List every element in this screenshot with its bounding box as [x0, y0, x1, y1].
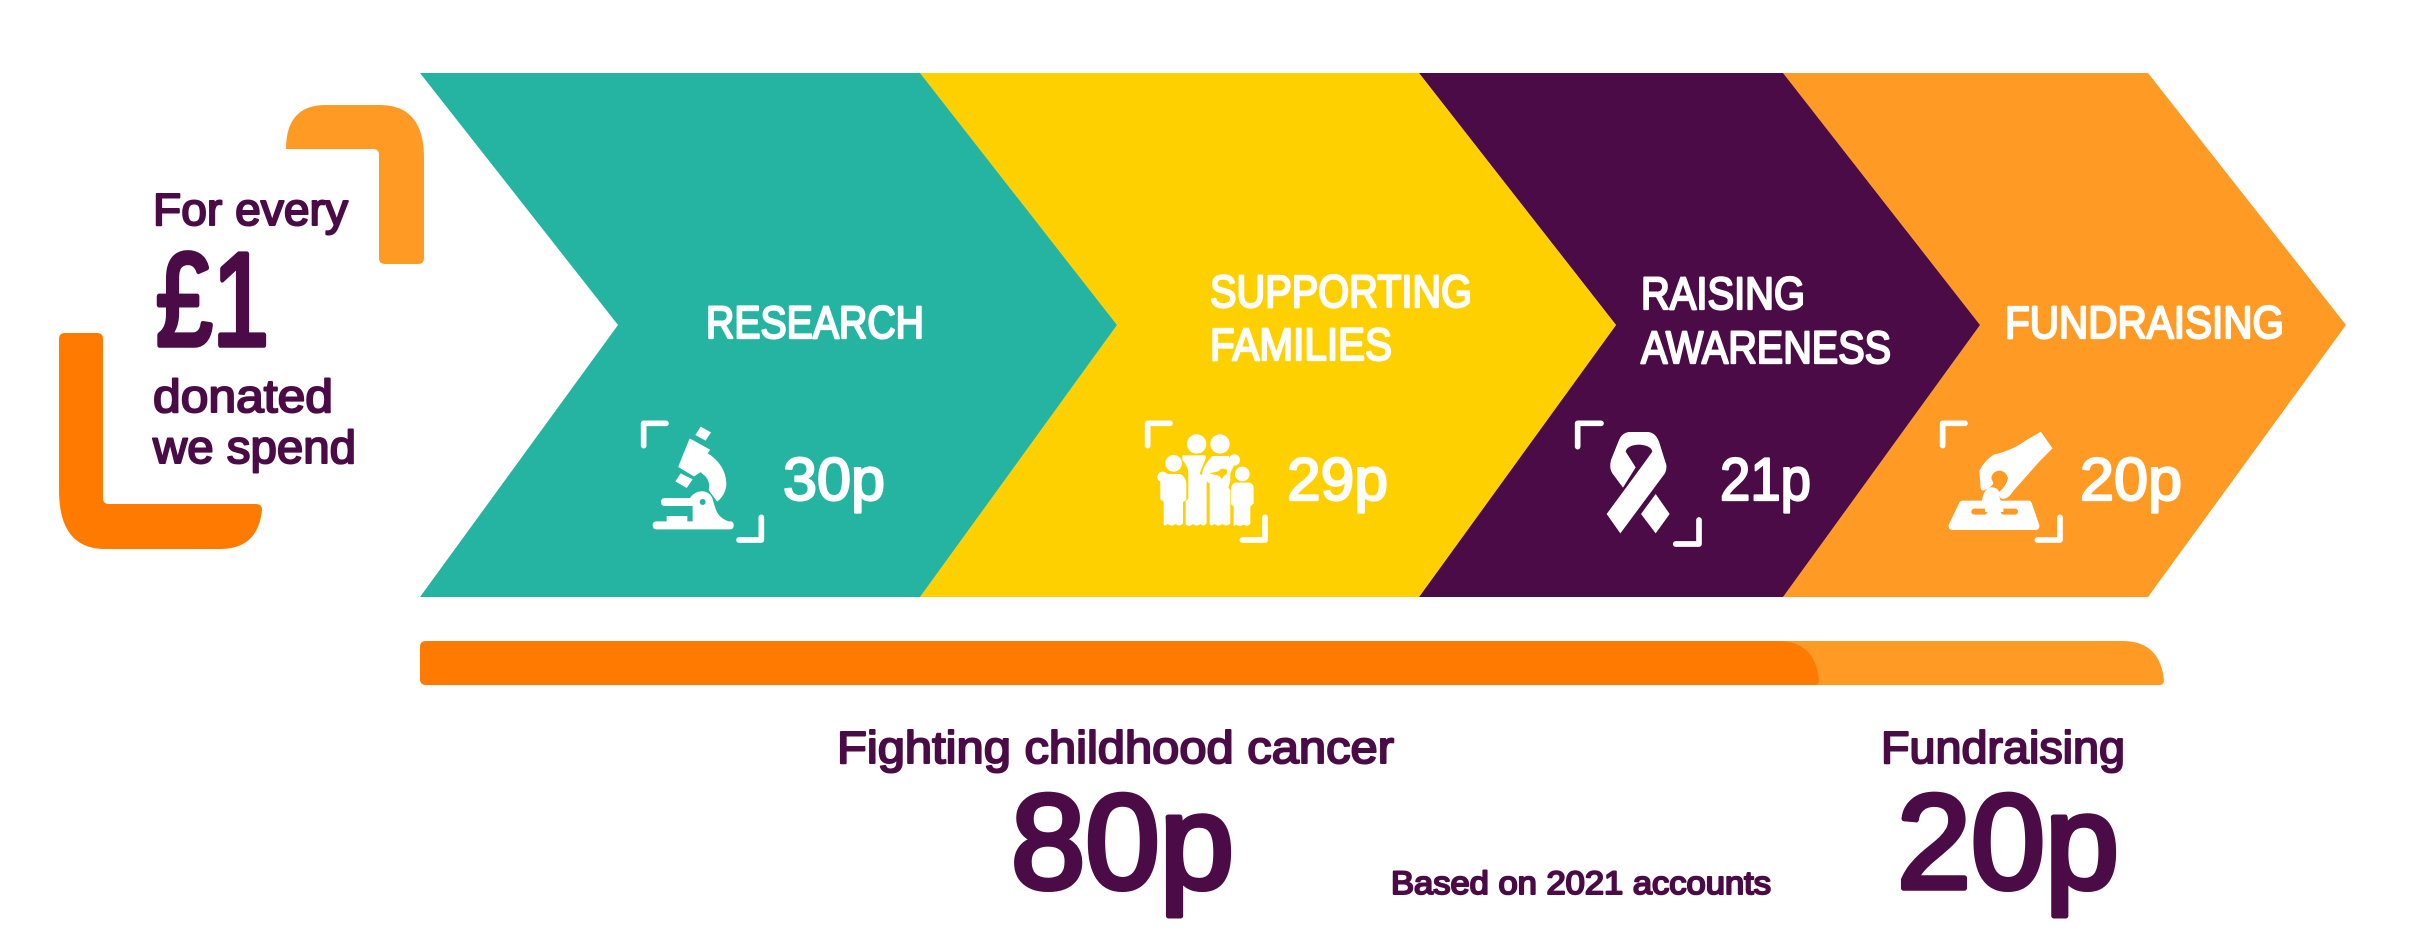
bar: 80p versus 20p split [420, 641, 2164, 685]
label: raising awareness: RAISING [1641, 268, 1805, 319]
label: fundraising total: Fundraising [1881, 722, 2125, 773]
label: raising awareness: AWARENESS [1641, 322, 1891, 373]
value: 21p: 21p [1720, 446, 1811, 513]
label: supporting families: SUPPORTING [1210, 266, 1472, 317]
heading: for every £1 donated we spend: donated [153, 370, 333, 422]
icon: microscope [644, 423, 761, 540]
panel: fundraising chevron [1783, 73, 2346, 597]
heading: for every £1 donated we spend: For every [153, 184, 349, 235]
footnote: based on 2021 accounts: Based on 2021 accounts [1391, 865, 1771, 901]
heading: for every £1 donated we spend: we spend [152, 421, 356, 473]
heading: for every £1 donated we spend: £1 [156, 226, 269, 373]
label: raising awareness [1641, 268, 1891, 373]
label: research: RESEARCH [706, 297, 924, 348]
label: fighting childhood cancer: Fighting childhood cancer [837, 722, 1394, 773]
label: supporting families: FAMILIES [1210, 319, 1392, 370]
value: 30p: 30p [783, 446, 885, 513]
value: 20p: 20p [2080, 446, 2182, 513]
panel: supporting families chevron [920, 73, 1616, 597]
icon: hand voting into box [1943, 423, 2060, 540]
panel: research chevron [420, 73, 1117, 597]
icon: family group [1148, 423, 1265, 540]
bracket: bottom left orange corner [59, 333, 262, 549]
icon: awareness ribbon [1578, 423, 1699, 544]
value: 29p: 29p [1287, 446, 1388, 513]
label: fundraising: FUNDRAISING [2005, 297, 2284, 348]
heading: for every £1 donated we spend [152, 184, 356, 473]
value: 20p total: 20p [1897, 768, 2119, 917]
panel: raising awareness chevron [1419, 73, 1980, 597]
label: supporting families [1210, 266, 1472, 370]
bracket: top right orange corner [286, 105, 424, 264]
value: 80p: 80p [1011, 768, 1234, 917]
